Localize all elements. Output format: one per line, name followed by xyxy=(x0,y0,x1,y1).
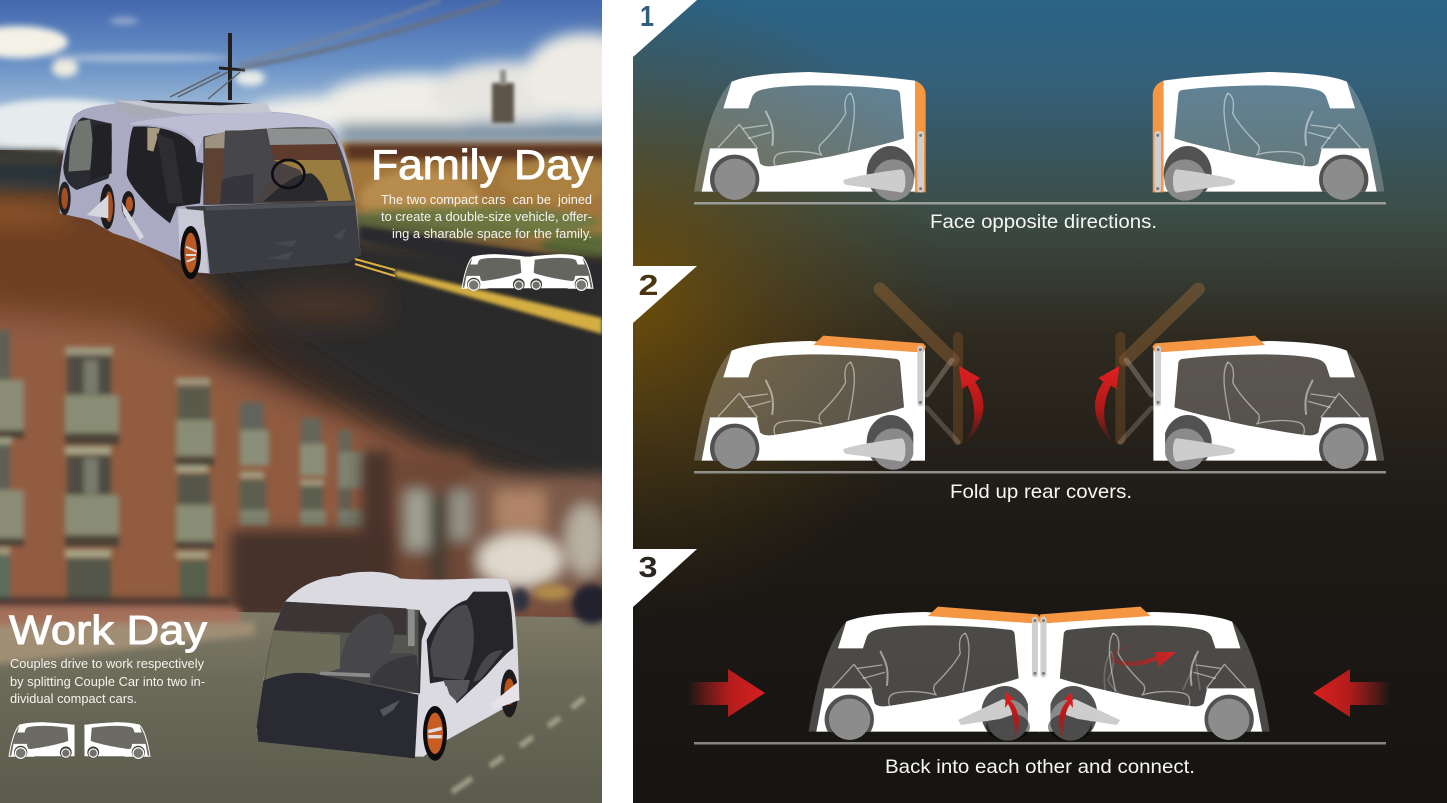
step 2 caption: Fold up rear covers. xyxy=(950,481,1132,503)
panel: connection steps xyxy=(633,0,1447,803)
step 2 left cover motion and arrow xyxy=(880,289,983,444)
step 2 badge xyxy=(633,266,697,323)
step 3 right car xyxy=(1038,607,1270,744)
step 1 caption: Face opposite directions. xyxy=(930,211,1157,233)
text block: Work Day description: dividual compact cars. xyxy=(10,692,137,706)
text block: Family Day description: ing a sharable space for the family. xyxy=(392,227,592,241)
text block: Work Day description: by splitting Couple Car into two in- xyxy=(10,675,205,689)
step 1 badge: 1 xyxy=(640,1,654,33)
text block: Work Day description xyxy=(10,657,205,706)
step 2 right cover motion and arrow xyxy=(1095,289,1198,444)
step 3 swirl arrow in cabin xyxy=(1111,645,1176,667)
step 3 left car xyxy=(809,607,1041,744)
work car: single compact car xyxy=(257,572,519,761)
step 2 badge: 2 xyxy=(638,270,658,302)
column B xyxy=(65,347,113,355)
step 3 ground line xyxy=(694,742,1386,744)
step 3 curved wheel arrows xyxy=(1005,692,1073,742)
family car: two joined compact cars xyxy=(58,100,361,279)
step 3 badge: 3 xyxy=(638,552,658,584)
step 3 left push arrow xyxy=(688,669,765,717)
column A xyxy=(0,330,10,380)
heading: Family Day: Family Day xyxy=(371,141,593,188)
step 3 right rear panel xyxy=(1065,699,1120,725)
column F xyxy=(339,430,351,452)
step 2 right car xyxy=(1152,336,1384,473)
text block: Family Day description: The two compact cars can be joined xyxy=(381,193,592,207)
icon: joined cars xyxy=(462,254,593,291)
step 1 ground line xyxy=(694,202,1386,204)
step 3 rear wheel shading xyxy=(986,713,1092,741)
step 2 ground line xyxy=(694,471,1386,474)
text block: Family Day description: to create a double-size vehicle, offer- xyxy=(381,210,592,224)
text block: Work Day description: Couples drive to work respectively xyxy=(10,657,205,671)
step 1 badge xyxy=(633,0,697,57)
column E xyxy=(301,418,321,444)
step 3 left rear panel xyxy=(958,699,1013,725)
column C xyxy=(176,378,210,385)
step 1 right car xyxy=(1153,72,1384,204)
step 3 badge xyxy=(633,549,697,607)
text block: Family Day description xyxy=(381,193,592,241)
step 3 right push arrow xyxy=(1313,669,1390,717)
column D xyxy=(240,402,264,430)
photo background: sky, road and brick street xyxy=(0,0,645,803)
heading: Work Day: Work Day xyxy=(9,607,208,653)
step 2 left car xyxy=(694,336,926,473)
step 3 caption: Back into each other and connect. xyxy=(885,756,1195,778)
step 1 left car xyxy=(694,72,926,204)
icon: separate cars xyxy=(9,722,150,759)
panel: photo of Family Day and Work Day xyxy=(0,0,645,803)
